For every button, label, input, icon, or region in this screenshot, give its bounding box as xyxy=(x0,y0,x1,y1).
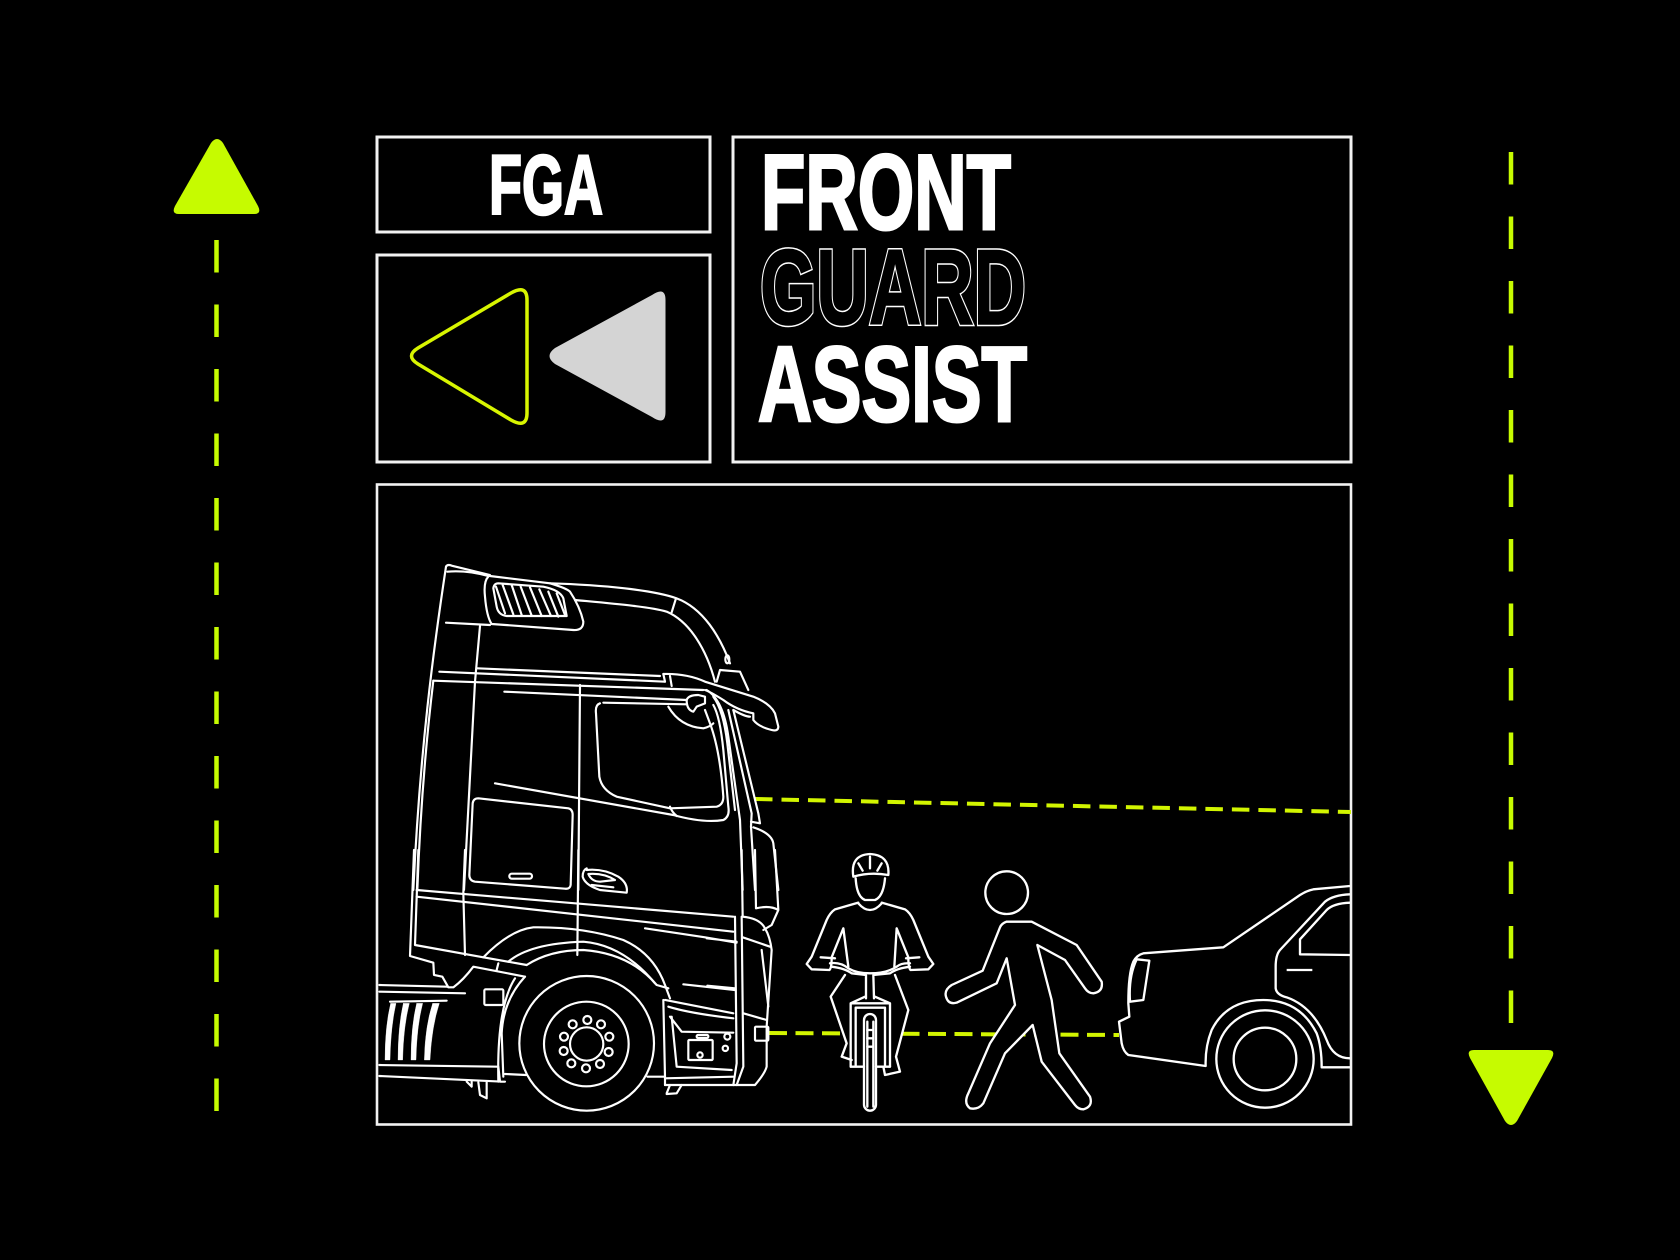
icon: grey filled triangle xyxy=(550,291,666,421)
door edge xyxy=(1276,894,1350,1058)
panel: FGA label xyxy=(377,137,710,232)
heading: FGA: FGA xyxy=(489,138,603,232)
air vent xyxy=(485,576,583,630)
rear window xyxy=(1300,903,1350,955)
heading: GUARD outlined: GUARD xyxy=(760,227,1026,347)
truck xyxy=(379,565,778,1111)
cyclist body fill xyxy=(807,903,933,1111)
panel: scene xyxy=(377,484,1351,1124)
icon: outlined triangle xyxy=(412,290,527,423)
chassis xyxy=(379,985,465,1002)
storage box xyxy=(469,798,573,889)
arrow: right dashed downward xyxy=(1469,152,1553,1125)
side window xyxy=(596,703,723,808)
wheel arches xyxy=(483,927,670,998)
mirror arm xyxy=(663,674,778,730)
body xyxy=(946,922,1102,1109)
wheel xyxy=(864,1014,876,1111)
roof deflector xyxy=(550,583,730,663)
arms xyxy=(807,903,858,970)
door handle xyxy=(583,868,627,893)
left dashed line xyxy=(214,240,219,1112)
pedestrian xyxy=(946,871,1102,1109)
heading: GUARD outlined xyxy=(760,227,1026,347)
car body xyxy=(1119,886,1350,1067)
truck upper cab xyxy=(413,565,778,890)
front grille and bumper xyxy=(742,850,778,930)
front lower panels xyxy=(665,1000,733,1018)
upper sensor dashed line xyxy=(755,799,1351,812)
cyclist xyxy=(807,854,933,1111)
wheel xyxy=(1216,1010,1314,1108)
chassis ribs xyxy=(385,1003,439,1060)
legs xyxy=(831,975,852,1060)
heading: ASSIST: ASSIST xyxy=(758,324,1027,444)
frame xyxy=(851,997,890,1067)
tail light xyxy=(1130,959,1149,1002)
horizontal cab lines xyxy=(433,668,703,700)
heading: GUARD outlined: GUARD xyxy=(760,227,1026,347)
car xyxy=(1119,886,1350,1108)
mirror xyxy=(668,707,713,728)
head xyxy=(985,871,1028,914)
lower sensor dashed line xyxy=(769,1033,1119,1035)
panel: title xyxy=(733,132,1351,462)
cab rear and bottom xyxy=(410,850,525,987)
icon: up triangle xyxy=(174,139,259,214)
arrow: left dashed upward xyxy=(174,139,259,1112)
helmet xyxy=(853,854,888,877)
head xyxy=(856,878,885,900)
panel: rewind triangles xyxy=(377,255,710,462)
icon: down triangle xyxy=(1469,1050,1553,1125)
pillar xyxy=(707,690,743,890)
wheel xyxy=(519,976,654,1111)
right dashed line xyxy=(1509,152,1513,1025)
handle xyxy=(1287,966,1312,973)
handlebars xyxy=(821,957,919,958)
heading: FRONT: FRONT xyxy=(761,132,1011,252)
truck lower body xyxy=(379,850,778,1111)
